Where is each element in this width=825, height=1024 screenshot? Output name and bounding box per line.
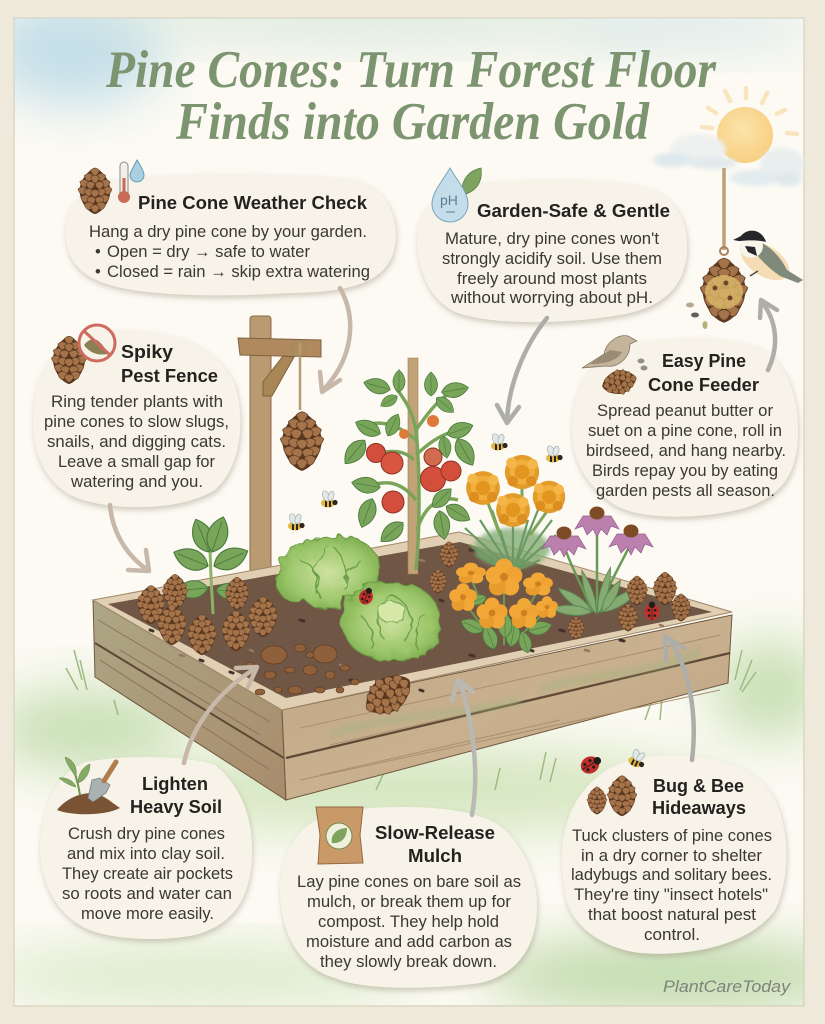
heading: Bug & Bee [653, 775, 744, 796]
body text: ladybugs and solitary bees. [571, 866, 772, 884]
body text: • [95, 263, 101, 281]
lettuce heads [276, 536, 441, 661]
body text: Open = dry → safe to water [107, 243, 310, 261]
heading: Spiky [121, 341, 174, 362]
bees [288, 433, 563, 530]
body text: moisture and add carbon as [306, 933, 512, 951]
crossbar [238, 338, 321, 357]
raised bed grass tufts [66, 650, 756, 790]
arrow: garden-safe panel to bed [497, 318, 547, 423]
body text: Birds repay you by eating [592, 462, 778, 480]
hanging cone [280, 411, 324, 471]
body text: Crush dry pine cones [68, 825, 225, 843]
title [105, 41, 717, 151]
body text: they slowly break down. [320, 953, 497, 971]
illustration: wooden post with hanging pine cone [238, 316, 324, 572]
watermark: PlantCareToday [663, 977, 792, 996]
body text: • [95, 243, 101, 261]
heading: Heavy Soil [130, 796, 222, 817]
panel: slow-release mulch [280, 807, 537, 988]
heading: Hideaways [652, 797, 746, 818]
heading [375, 822, 495, 866]
front boards [282, 615, 732, 800]
ladybugs [357, 585, 659, 620]
title: Finds into Garden Gold [175, 93, 650, 151]
body text: birdseed, and hang nearby. [586, 442, 786, 460]
soil specks [150, 550, 624, 691]
heading: Cone Feeder [648, 374, 759, 395]
body text: Lay pine cones on bare soil as [297, 873, 521, 891]
body text: compost. They help hold [318, 913, 499, 931]
heading: Slow-Release [375, 822, 495, 843]
tomato plant [339, 358, 480, 574]
panel: lighten heavy soil [40, 757, 252, 939]
body text [297, 873, 521, 971]
heading: Pest Fence [121, 365, 218, 386]
body text: Hang a dry pine cone by your garden. [89, 223, 367, 241]
body text: that boost natural pest [588, 906, 756, 924]
panel: easy pine cone feeder [572, 336, 798, 517]
body text: Spread peanut butter or [597, 402, 774, 420]
body text: Leave a small gap for [58, 453, 215, 471]
arrow: feeder panel to hanging feeder [760, 300, 777, 370]
icon: pH drop with leaf: pH [440, 192, 458, 208]
body text [44, 393, 229, 491]
left side boards [93, 600, 286, 800]
panel: spiky pest fence [33, 325, 240, 507]
post [250, 316, 271, 572]
arrow: mulch panel to large cone [452, 680, 475, 815]
body text: watering and you. [70, 473, 203, 491]
title: Pine Cones: Turn Forest Floor [105, 41, 717, 99]
body text: Closed = rain → skip extra watering [107, 263, 370, 281]
body text: suet on a pine cone, roll in [588, 422, 782, 440]
heading [652, 775, 746, 818]
body text: control. [644, 926, 700, 944]
arrow: bug panel to right cones [665, 636, 694, 760]
body text: They're tiny "insect hotels" [574, 886, 768, 904]
small leafy plant [170, 514, 252, 614]
panel: pine cone weather check [66, 160, 396, 295]
body text [586, 402, 786, 500]
marigold plant [465, 455, 565, 572]
pine cones in the bed [356, 542, 691, 725]
orange flower plant [449, 559, 558, 654]
stake [408, 358, 418, 574]
heading: Garden-Safe & Gentle [477, 200, 670, 221]
body text [89, 223, 370, 281]
coneflowers [542, 506, 653, 617]
illustration: sun and clouds [653, 88, 804, 186]
heading: Lighten [142, 773, 208, 794]
icon: pH drop with leaf [432, 168, 481, 222]
body text: garden pests all season. [596, 482, 775, 500]
icon: trowel, soil and seedling [57, 757, 120, 814]
heading: Pine Cone Weather Check [138, 192, 368, 213]
panel: bug and bee hideaways [562, 747, 786, 954]
tomatoes [424, 448, 442, 466]
body text: pine cones to slow slugs, [44, 413, 229, 431]
illustration: hanging pine cone bird feeder with chickadee [686, 168, 803, 329]
arrow: soil panel to crushed cones [184, 667, 257, 763]
soil [93, 532, 732, 710]
rope [299, 342, 301, 410]
arrow: pest fence panel to cone ring [110, 505, 149, 571]
body text: so roots and water can [62, 885, 232, 903]
body text: without worrying about pH. [450, 289, 653, 307]
body text [571, 827, 772, 944]
body text: freely around most plants [457, 270, 647, 288]
icon: pine cone with thermometer and drop [78, 160, 144, 214]
body text: and mix into clay soil. [67, 845, 225, 863]
body text: Mature, dry pine cones won't [445, 230, 659, 248]
heading [121, 341, 218, 386]
arrow: weather panel to hanging cone [320, 288, 350, 392]
heading [130, 773, 222, 817]
heading [648, 350, 759, 395]
body text: Tuck clusters of pine cones [572, 827, 772, 845]
body text: mulch, or break them up for [307, 893, 511, 911]
body text: They create air pockets [62, 865, 233, 883]
body text: in a dry corner to shelter [581, 847, 763, 865]
crushed pine cones pile [246, 644, 359, 695]
panel: garden-safe and gentle [417, 168, 687, 322]
heading: Easy Pine [662, 350, 746, 371]
icon: ladybug, bee and pine cones [578, 747, 649, 816]
stems [365, 388, 462, 570]
body text [442, 230, 662, 307]
leaves [362, 375, 392, 397]
icon: pine cone with no-slug sign [51, 325, 115, 384]
body text: strongly acidify soil. Use them [442, 250, 662, 268]
icon: small bird on pine cone [582, 336, 648, 399]
heading: Mulch [408, 845, 462, 866]
pine cones ring around small plant [137, 574, 278, 655]
illustration: raised garden bed [93, 532, 732, 800]
body text [62, 825, 233, 923]
body text: snails, and digging cats. [47, 433, 226, 451]
body text: move more easily. [81, 905, 214, 923]
icon: mulch bag [316, 807, 363, 864]
body text: Ring tender plants with [51, 393, 223, 411]
